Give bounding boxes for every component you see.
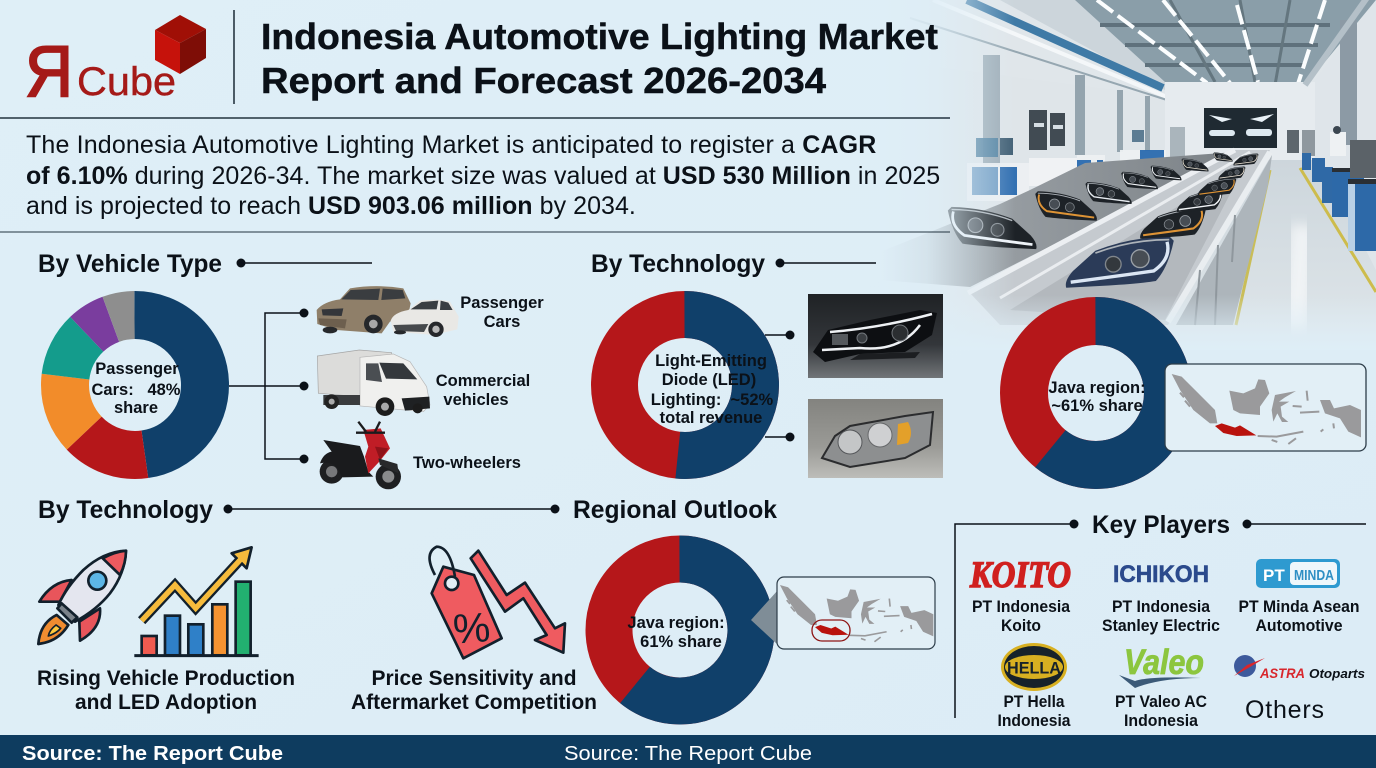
donut chart: java share [1024,321,1168,465]
heading: by technology: By Technology [38,496,213,524]
logo: Astra Otoparts: Otoparts [1309,666,1365,681]
logo: Hella [1001,643,1067,691]
caption: Minda: Automotive [1256,617,1342,635]
icon: passenger cars [317,286,459,337]
panel: by technology donut [591,250,943,478]
image: halogen headlamp [808,399,943,478]
logo: RCube [25,15,206,112]
heading: by technology [591,250,876,278]
caption: Valeo: Indonesia [1124,712,1199,730]
passenger cars label [460,294,544,331]
headlamps right row [1066,154,1258,288]
panel: restraint [351,547,597,714]
title [261,16,938,101]
map pointer [751,590,778,645]
caption: Minda [1238,598,1360,635]
back wall display [1204,108,1277,148]
caption: Koito [972,598,1071,635]
caption: Hella: Indonesia [998,712,1071,730]
icon: rocket [38,551,126,644]
caption: price sensitivity: Price Sensitivity and [372,666,576,690]
heading: key players [955,511,1366,718]
donut label: total revenue [660,409,762,427]
caption: Hella [998,693,1071,730]
icon: commercial truck [317,350,430,416]
logo: RCube: Cube [77,60,176,104]
right wall [1315,0,1376,280]
intro text block [26,131,940,220]
headlamps left row [948,152,1233,249]
logo: PT Minda: MINDA [1294,567,1334,584]
logo: Koito: KOITO [969,555,1071,596]
donut label: share [114,399,158,417]
ceiling lights [1097,0,1325,87]
caption: price sensitivity: Aftermarket Competition [351,690,597,714]
donut label: Light-Emitting [655,352,767,370]
caption: Stanley Electric: Stanley Electric [1102,617,1220,635]
caption: Minda: PT Minda Asean [1238,598,1360,616]
logo: RCube: Я [25,32,73,112]
donut label: Java region: [627,614,725,632]
icon: scooter [320,422,401,489]
commercial vehicles label: Commercial [436,372,530,390]
donut label [1048,379,1146,415]
commercial vehicles label [436,372,530,409]
panel: by vehicle type [38,250,544,489]
icon: growth bar chart [134,547,259,656]
donut label [651,352,774,427]
left wall [880,60,1165,235]
image: LED headlamp [808,294,943,378]
panel: growth driver [37,496,560,714]
donut label: Diode (LED) [662,371,756,389]
donut label [92,360,181,417]
caption: rising vehicle production: and LED Adoption [75,690,257,714]
ceiling [1075,0,1376,92]
intro text block: The Indonesia Automotive Lighting Market is anticipated to register a CAGR [26,131,876,159]
footer: Source: The Report Cube [564,743,812,765]
donut label: Lighting: ~52% [651,391,774,409]
two-wheelers label: Two-wheelers [413,454,521,472]
donut label: ~61% share [1051,397,1143,415]
logo: PT Minda [1256,559,1340,588]
footer: Source: The Report Cube [22,743,283,765]
caption: price sensitivity [351,666,597,714]
panel: key players [955,511,1366,730]
intro text block: of 6.10% during 2026-34. The market size was valued at USD 530 Million in 2025 [26,162,940,190]
connector tree [229,308,308,464]
logo: Astra Otoparts [1234,655,1365,681]
icon: price tag: % [452,603,492,653]
photo: headlamp factory floor [880,0,1376,350]
passenger cars label: Passenger [460,294,544,312]
donut label [627,614,725,651]
title: Report and Forecast 2026-2034 [261,60,826,101]
donut chart: technology share [614,314,756,456]
connector dots [765,330,794,442]
left workbenches [967,110,1166,201]
caption: Koito: PT Indonesia [972,598,1071,616]
upper left wall [1000,0,1165,90]
caption: others: Others [1245,696,1324,724]
map panel: Indonesia [1165,364,1366,451]
donut chart: vehicle type share [65,315,205,455]
footer [0,735,1376,768]
panel: regional outlook [573,496,935,701]
donut label: Passenger [95,360,179,378]
logo: Astra Otoparts: ASTRA [1259,665,1305,681]
panel: java region donut [1024,321,1366,465]
right cabinets [1302,126,1376,251]
donut chart: regional share [609,559,751,701]
logo: Hella: HELLA [1007,658,1061,678]
back wall [1165,82,1315,164]
floor [1160,160,1376,350]
title: Indonesia Automotive Lighting Market [261,16,938,57]
caption: Koito: Koito [1001,617,1041,635]
donut label: 61% share [640,633,722,651]
logo: PT Minda: PT [1263,566,1285,585]
caption: rising vehicle production: Rising Vehicle Production [37,666,295,690]
caption: rising vehicle production [37,666,295,714]
heading: by technology: By Technology [591,250,765,278]
conveyor tables [880,152,1236,287]
donut label: Java region: [1048,379,1146,397]
caption: Hella: PT Hella [1004,693,1065,711]
donut label: Cars: 48% [92,381,181,399]
heading: by technology [38,496,560,524]
logo: Valeo: Valeo [1124,643,1204,682]
caption: Stanley Electric: PT Indonesia [1112,598,1211,616]
icon: price tag [430,547,502,658]
logo: Ichikoh: ICHIKOH [1113,561,1209,588]
intro text block: and is projected to reach USD 903.06 million by 2034. [26,192,636,220]
passenger cars label: Cars [484,313,520,331]
caption: Valeo: PT Valeo AC [1115,693,1207,711]
caption: Valeo [1115,693,1207,730]
heading: by vehicle type: By Vehicle Type [38,250,222,278]
caption: Stanley Electric [1102,598,1220,635]
icon: falling arrow [471,551,565,653]
commercial vehicles label: vehicles [443,391,509,409]
heading: regional outlook: Regional Outlook [573,496,777,524]
heading: by vehicle type [38,250,372,278]
heading: key players: Key Players [1092,511,1230,539]
map panel: Indonesia highlight [777,577,935,649]
